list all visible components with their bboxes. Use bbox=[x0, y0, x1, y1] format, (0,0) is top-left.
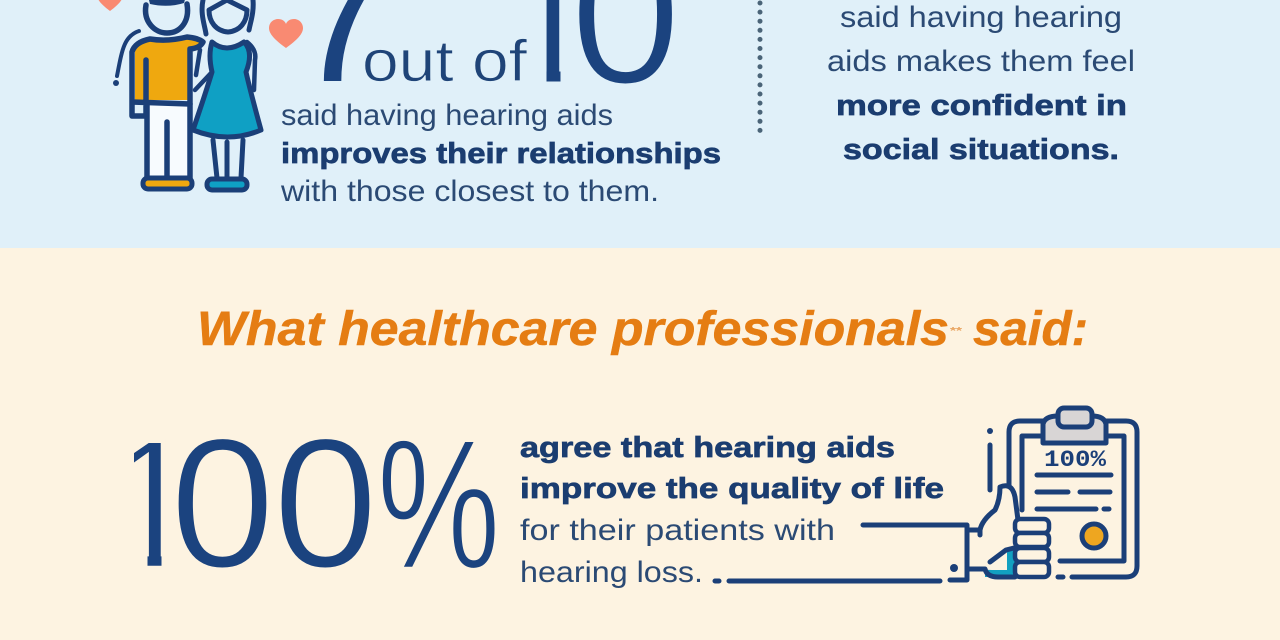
icon: thumbs up and clipboard bbox=[715, 408, 1137, 581]
text: quality of life statement: improve the quality of life bbox=[520, 473, 944, 505]
text: confidence statement: aids makes them feel bbox=[827, 45, 1135, 78]
statistic: 100%: 0 bbox=[273, 400, 378, 607]
text: relationships statement: improves their relationships bbox=[281, 138, 721, 170]
statistic: 100%: 1 bbox=[100, 402, 203, 608]
text: confidence statement: said having hearing bbox=[840, 1, 1122, 34]
heading: What healthcare professionals bbox=[197, 303, 949, 356]
text: confidence statement: more confident in bbox=[836, 90, 1127, 122]
statistic: 100%: 0 bbox=[170, 400, 275, 607]
icon: couple bbox=[113, 0, 261, 190]
text: relationships statement bbox=[280, 99, 721, 208]
icon: left heart bbox=[97, 0, 123, 11]
footnote mark: ** bbox=[950, 326, 962, 337]
statistic: 7 out of 10 bbox=[290, 0, 681, 127]
statistic: 100% bbox=[100, 400, 500, 608]
panel: healthcare professionals cream section bbox=[0, 248, 1280, 640]
text: relationships statement: with those closest to them. bbox=[280, 175, 659, 208]
statistic: 100%: % bbox=[377, 401, 500, 608]
text: relationships statement: said having hearing aids bbox=[281, 99, 613, 132]
text: confidence statement bbox=[827, 1, 1135, 166]
heading end: said: bbox=[973, 303, 1088, 356]
panel: patients blue section bbox=[0, 0, 1280, 248]
icon: thumbs up and clipboard: 100% bbox=[1044, 447, 1106, 473]
text: confidence statement: social situations. bbox=[843, 134, 1119, 166]
statistic: 7 out of 10: out of bbox=[362, 29, 528, 94]
text: quality of life statement bbox=[520, 432, 944, 589]
text: quality of life statement: agree that hearing aids bbox=[520, 432, 895, 464]
text: quality of life statement: hearing loss. bbox=[520, 556, 703, 589]
text: quality of life statement: for their patients with bbox=[520, 514, 835, 547]
icon: right heart bbox=[269, 19, 303, 48]
